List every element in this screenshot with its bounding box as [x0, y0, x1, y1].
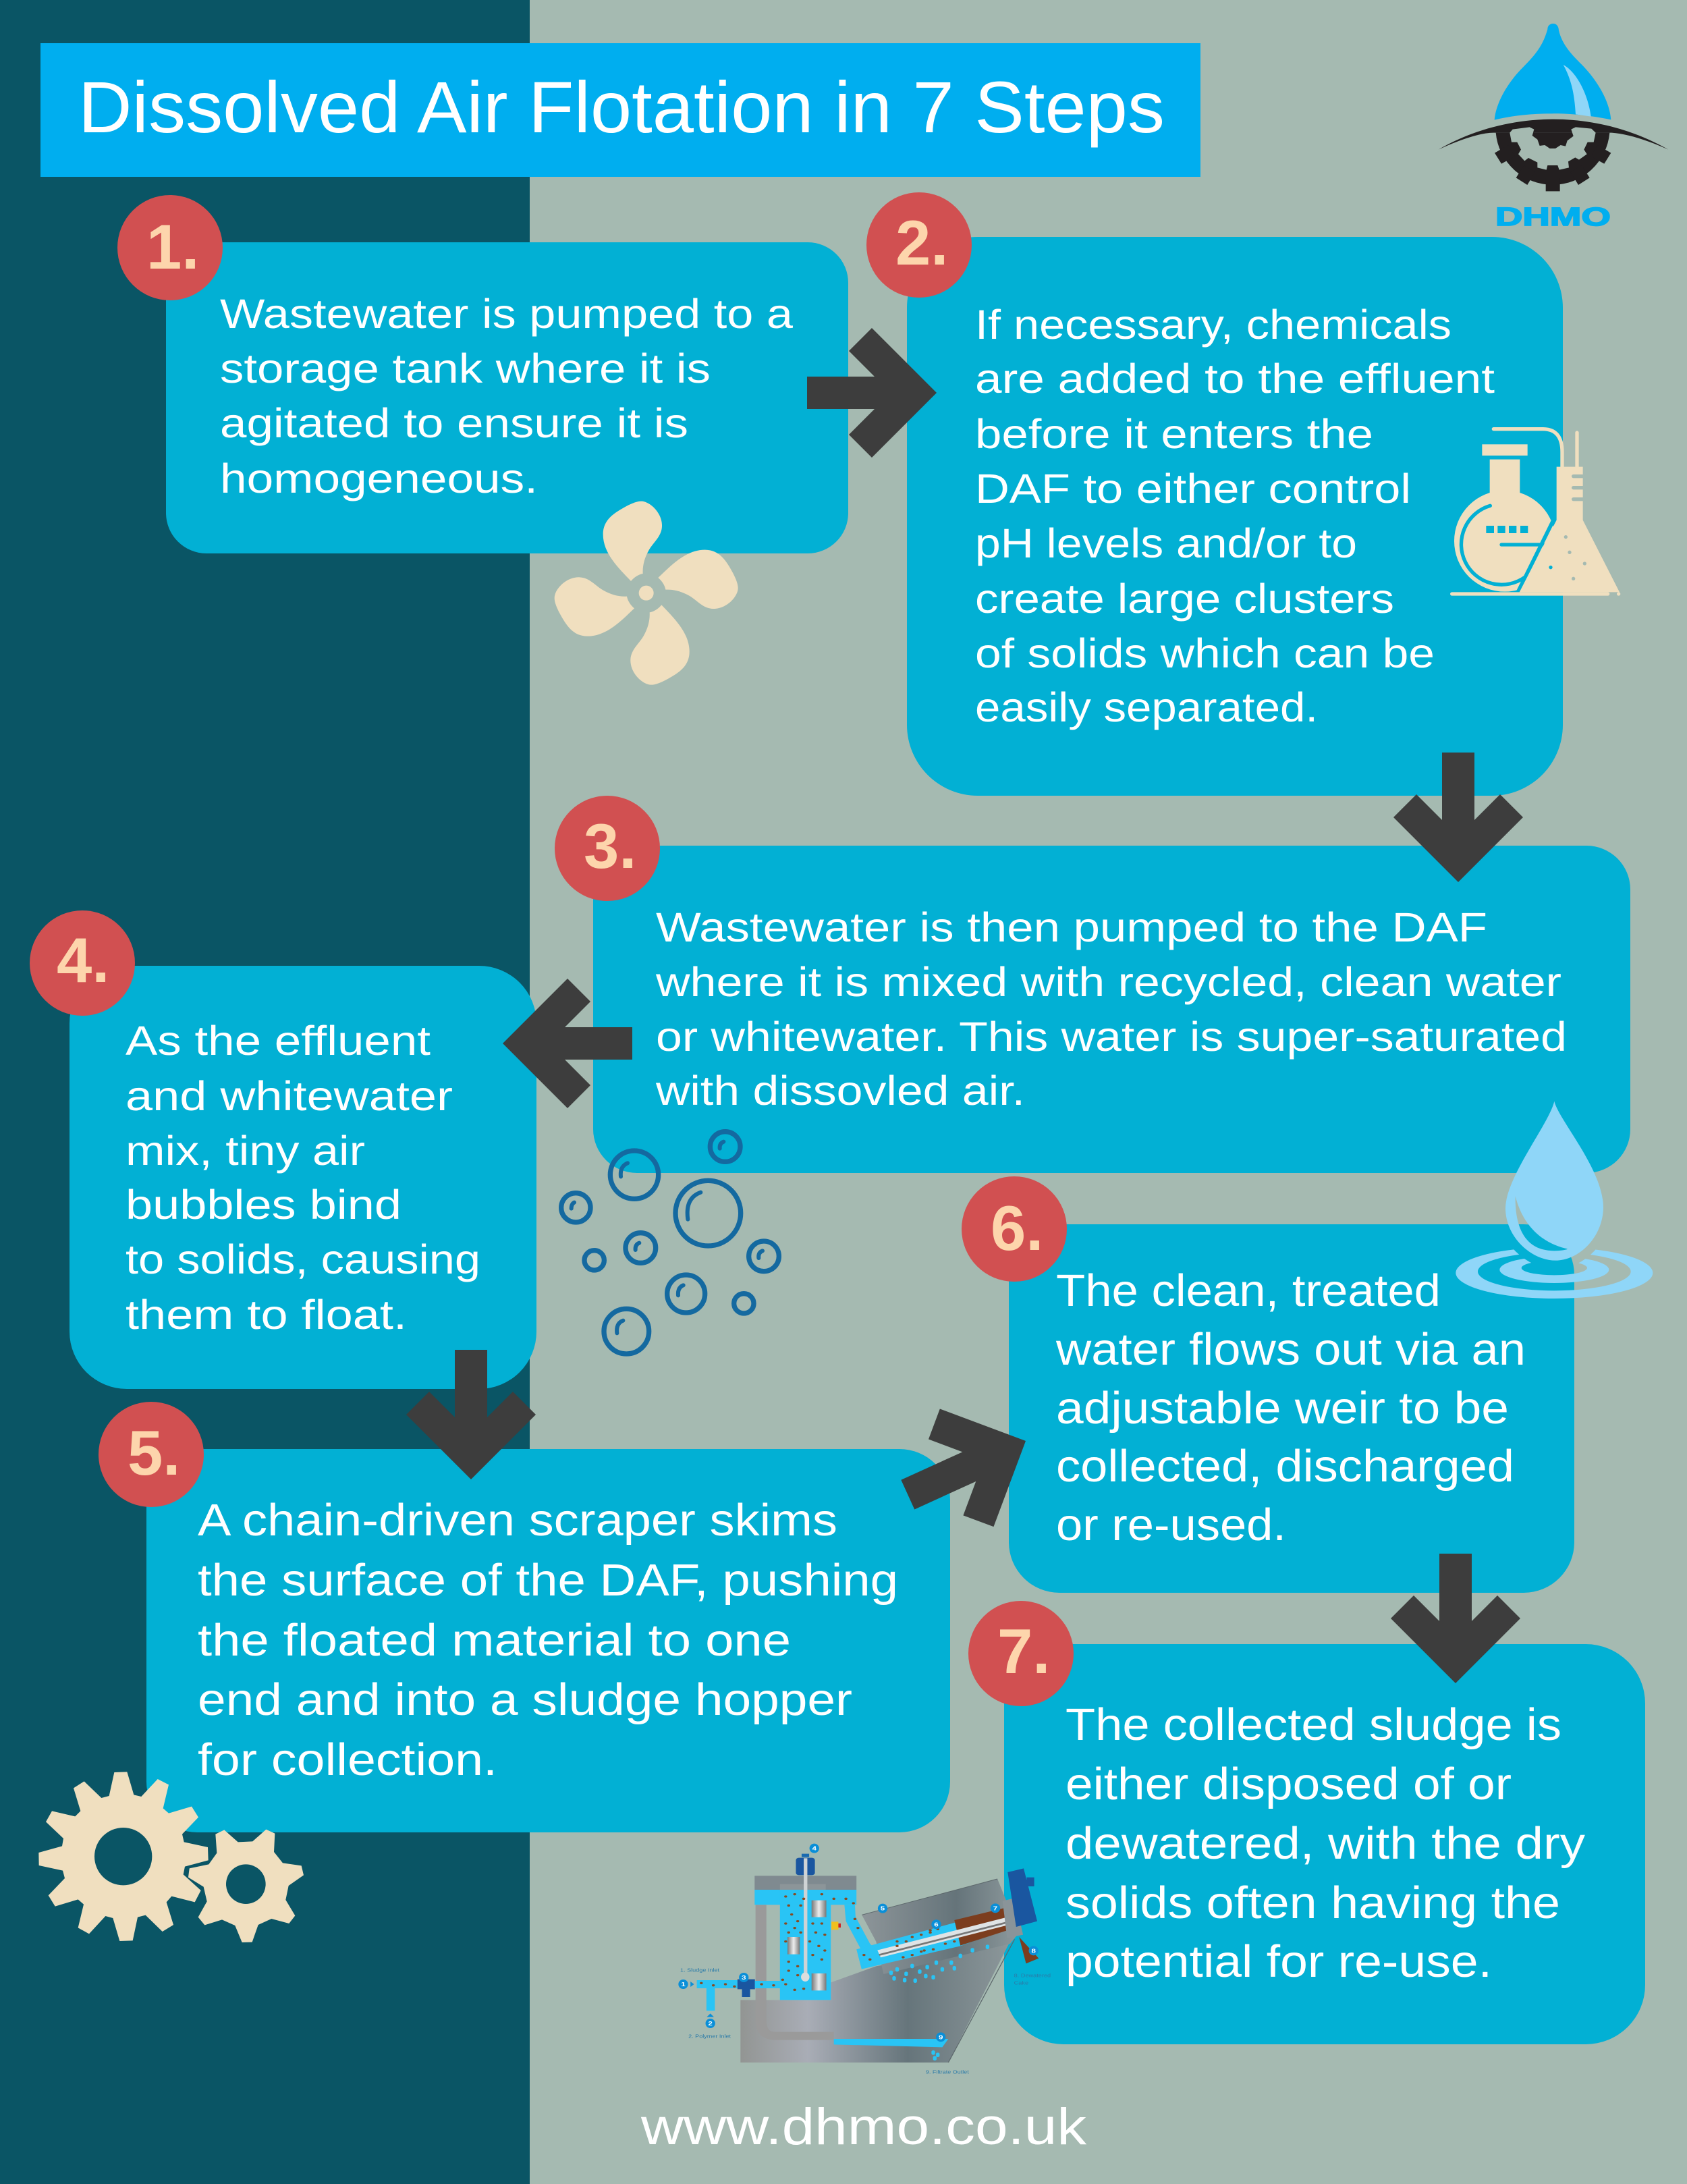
text: step 3: with dissovled air. — [655, 1068, 1025, 1114]
panel: step 5 — [99, 1402, 950, 1832]
diagram: dewatering press cross-section — [678, 1844, 1051, 2075]
badge: 2: 2. — [895, 207, 948, 278]
badge: 1: 1. — [146, 211, 199, 282]
diagram: dewatering press cross-section: Cake — [1014, 1980, 1028, 1986]
arrow: step 5 to 6 — [881, 1382, 1053, 1554]
diagram: dewatering press cross-section: 1 — [681, 1982, 686, 1988]
badge: 7 — [968, 1601, 1074, 1706]
text: step 2: pH levels and/or to — [975, 520, 1357, 566]
text: step 2: easily separated. — [975, 684, 1318, 730]
text: step 7: The collected sludge is — [1066, 1699, 1561, 1750]
arrow: step 3 to 4 — [503, 979, 632, 1108]
panel: step 2 — [866, 192, 1563, 796]
panel: step 6 — [962, 1176, 1574, 1593]
text: step 5: A chain-driven scraper skims — [198, 1495, 837, 1546]
diagram: dewatering press cross-section: 8. Dewatered — [1014, 1973, 1051, 1978]
icon: gears — [38, 1772, 304, 1942]
text: step 3: Wastewater is then pumped to the DAF — [656, 904, 1487, 950]
arrow: step 4 to 5 — [406, 1350, 536, 1479]
badge: 4 — [30, 910, 135, 1016]
text: step 1: agitated to ensure it is — [220, 400, 688, 446]
text: step 4: bubbles bind — [126, 1182, 402, 1228]
text: step 5: the surface of the DAF, pushing — [198, 1555, 898, 1606]
text: step 6: The clean, treated — [1056, 1265, 1441, 1316]
icon: air bubbles — [561, 1132, 779, 1354]
diagram: dewatering press cross-section: 6 — [934, 1922, 939, 1928]
DHMO logo — [1439, 24, 1668, 231]
badge: 1 — [117, 195, 223, 300]
text: step 6: or re-used. — [1056, 1500, 1286, 1550]
text: step 2 — [975, 302, 1495, 730]
text: step 2: are added to the effluent — [975, 356, 1495, 402]
badge: 3 — [555, 796, 660, 901]
text: step 1: storage tank where it is — [220, 346, 711, 391]
text: step 6: water flows out via an — [1055, 1324, 1526, 1375]
text: step 7: dewatered, with the dry — [1066, 1818, 1586, 1869]
diagram: dewatering press cross-section: 9 — [939, 2035, 943, 2041]
diagram: dewatering press cross-section: 8 — [1031, 1948, 1036, 1955]
text: step 7: either disposed of or — [1066, 1759, 1512, 1809]
text: step 5: for collection. — [198, 1735, 497, 1785]
badge: 6: 6. — [991, 1193, 1043, 1263]
text: step 5: end and into a sludge hopper — [198, 1674, 852, 1725]
text: step 2: If necessary, chemicals — [975, 302, 1451, 348]
badge: 3: 3. — [584, 811, 636, 881]
text: step 4 — [126, 1018, 480, 1338]
panel: step 7 — [968, 1601, 1645, 2044]
panel: step 3 — [555, 796, 1630, 1173]
title banner: Dissolved Air Flotation in 7 Steps — [78, 66, 1165, 148]
badge: 4: 4. — [57, 925, 109, 995]
diagram: dewatering press cross-section: 3 — [742, 1975, 746, 1982]
text: step 3: where it is mixed with recycled, clean water — [655, 959, 1561, 1005]
badge: 6 — [962, 1176, 1067, 1282]
text: step 5 — [198, 1495, 898, 1785]
badge: 5: 5. — [128, 1417, 180, 1488]
badge: 2 — [866, 192, 972, 298]
text: step 2: DAF to either control — [975, 466, 1411, 512]
text: step 3: or whitewater. This water is super-saturated — [656, 1014, 1567, 1060]
text: step 4: mix, tiny air — [126, 1128, 365, 1174]
panel: step 4 — [30, 910, 536, 1389]
icon: chemistry flasks — [1452, 429, 1620, 596]
text: step 6 — [1055, 1265, 1526, 1550]
diagram: dewatering press cross-section: 2. Polymer Inlet — [688, 2033, 731, 2039]
badge: 7: 7. — [997, 1616, 1050, 1687]
arrow: step 1 to 2 — [807, 328, 937, 458]
text: step 7 — [1066, 1699, 1586, 1987]
diagram: dewatering press cross-section: 7 — [993, 1906, 998, 1912]
text: step 4: and whitewater — [126, 1073, 453, 1119]
text: step 4: As the effluent — [126, 1018, 431, 1064]
text: step 2: before it enters the — [975, 411, 1373, 457]
text: step 2: of solids which can be — [975, 630, 1435, 676]
text: step 3 — [655, 904, 1567, 1114]
diagram: dewatering press cross-section: 2 — [708, 2021, 713, 2027]
title banner — [40, 43, 1200, 177]
arrow: step 2 to 3 — [1393, 753, 1523, 882]
text: step 7: potential for re-use. — [1066, 1936, 1492, 1987]
text: step 7: solids often having the — [1066, 1878, 1560, 1928]
DHMO logo: DHMO — [1495, 203, 1611, 231]
diagram: dewatering press cross-section: 1. Sludge Inlet — [680, 1967, 720, 1973]
icon: propeller fan — [555, 501, 738, 685]
text: step 5: the floated material to one — [198, 1615, 791, 1666]
text: step 2: create large clusters — [975, 576, 1394, 622]
text: step 4: to solids, causing — [126, 1236, 480, 1282]
text: step 1: homogeneous. — [220, 456, 538, 501]
text: step 6: collected, discharged — [1056, 1441, 1514, 1492]
icon: water drop with ripples — [1456, 1101, 1653, 1299]
footer: website: www.dhmo.co.uk — [640, 2098, 1087, 2156]
panel: step 1 — [117, 195, 848, 553]
text: step 1 — [220, 291, 793, 501]
text: step 4: them to float. — [126, 1292, 407, 1338]
diagram: dewatering press cross-section: 5 — [881, 1906, 885, 1912]
text: step 6: adjustable weir to be — [1056, 1383, 1509, 1434]
arrow: step 6 to 7 — [1391, 1554, 1520, 1683]
text: step 1: Wastewater is pumped to a — [220, 291, 793, 337]
diagram: dewatering press cross-section: 9. Filtrate Outlet — [926, 2069, 969, 2075]
diagram: dewatering press cross-section: 4 — [812, 1846, 817, 1852]
badge: 5 — [99, 1402, 204, 1507]
